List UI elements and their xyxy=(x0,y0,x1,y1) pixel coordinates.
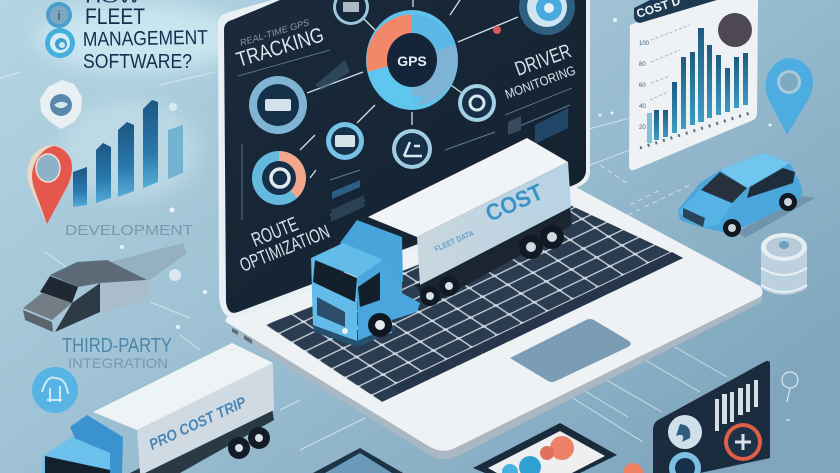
cab xyxy=(311,220,420,347)
spacebar row xyxy=(390,252,683,393)
title: FLEET xyxy=(85,4,145,29)
icons: title badges xyxy=(45,2,75,58)
barrel xyxy=(761,233,807,295)
wheels xyxy=(420,225,564,306)
label: third-party integration: INTEGRATION xyxy=(68,355,168,371)
icon: blue integration badge xyxy=(32,367,78,413)
icon: small ring xyxy=(782,372,798,420)
donut chart xyxy=(366,10,458,110)
connector lines xyxy=(238,0,572,220)
trailer: PRO COST TRIP xyxy=(147,393,250,454)
bottom-left truck xyxy=(42,343,274,473)
icon: red location pin xyxy=(27,145,72,224)
barcode xyxy=(715,380,758,431)
screen label: route optimization xyxy=(237,213,333,277)
cab xyxy=(42,415,123,473)
label: third-party integration xyxy=(62,335,172,371)
title: SOFTWARE? xyxy=(83,51,192,73)
header tab xyxy=(634,0,717,23)
tablet xyxy=(473,423,617,473)
main truck xyxy=(311,138,572,347)
label: third-party integration: THIRD-PARTY xyxy=(62,335,172,357)
screen label: driver monitoring xyxy=(503,40,578,102)
chassis shadow xyxy=(415,205,572,305)
badges xyxy=(668,415,702,449)
bar chart: development xyxy=(73,100,183,207)
trackpad xyxy=(510,319,631,382)
bars xyxy=(647,28,748,143)
car xyxy=(678,153,815,238)
chart panel xyxy=(629,0,758,170)
ports xyxy=(232,328,252,344)
screen label: route optimization: OPTIMIZATION xyxy=(237,222,333,277)
donut chart: GPS xyxy=(397,53,427,69)
icon: white badge xyxy=(40,80,82,129)
screen label: route optimization: ROUTE xyxy=(249,213,301,252)
axis labels: 40 xyxy=(639,104,646,110)
icons: title badges: i xyxy=(58,8,61,23)
rear wheels xyxy=(228,427,270,459)
keyboard xyxy=(265,205,683,402)
dashboard on laptop screen xyxy=(234,0,578,277)
badge xyxy=(718,13,752,47)
node icons xyxy=(249,0,575,205)
axis labels: 100 xyxy=(639,41,650,47)
screen label: driver monitoring: MONITORING xyxy=(503,62,578,102)
trailer xyxy=(368,138,571,285)
floor connector lines xyxy=(0,72,727,450)
small device bottom xyxy=(313,448,403,473)
icon: blue location pin xyxy=(766,58,813,135)
icon: coral dot xyxy=(623,463,643,473)
axis labels xyxy=(639,41,650,131)
gray truck xyxy=(23,243,187,332)
trailer: FLEET DATA xyxy=(433,228,475,254)
sparkles xyxy=(120,18,772,329)
axis labels: 20 xyxy=(639,125,646,131)
screen label: tracking: REAL-TIME GPS xyxy=(239,17,310,48)
dark card xyxy=(653,361,770,473)
title: MANAGEMENT xyxy=(83,27,208,51)
label: development: DEVELOPMENT xyxy=(65,222,193,239)
axis labels: 60 xyxy=(639,83,646,89)
small dashboard details xyxy=(315,26,568,222)
trailer: COST xyxy=(481,178,547,227)
axis labels: 80 xyxy=(639,62,646,68)
screen label: driver monitoring: DRIVER xyxy=(512,40,574,81)
laptop xyxy=(218,0,763,459)
title xyxy=(83,0,208,73)
screen label: tracking: TRACKING xyxy=(234,23,327,72)
laptop base xyxy=(226,184,763,459)
trailer xyxy=(93,343,274,473)
laptop screen xyxy=(218,0,590,319)
